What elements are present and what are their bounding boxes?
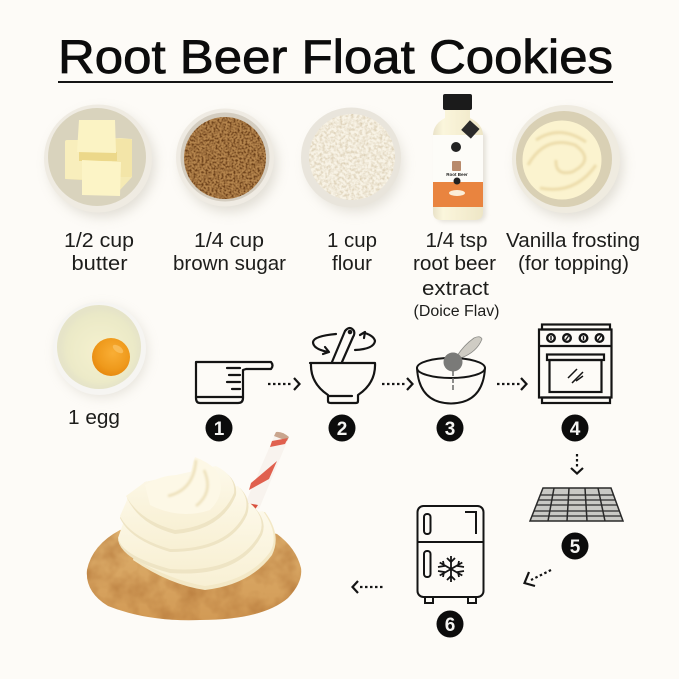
step 2: mixing bowl with spoon icon [310, 328, 375, 403]
arrow 6 to cookie [352, 581, 383, 593]
bottle label details: Root Beer [446, 172, 468, 177]
ingredient: butter [44, 104, 155, 217]
ingredient labels: butter [72, 253, 128, 275]
ingredient: root beer extract bottle [433, 94, 486, 222]
title: Root Beer Float Cookies [58, 31, 613, 84]
step number badges: 4 [570, 419, 581, 440]
step 1: measuring cup icon [196, 362, 272, 403]
tier 3 [120, 488, 248, 552]
cookie base [87, 515, 301, 620]
arrow 5 to 6 [524, 570, 551, 586]
snowflake [438, 556, 464, 582]
ingredient labels: (Doice Flav) [414, 303, 500, 320]
step 6: fridge icon [418, 506, 484, 603]
step number badges: 3 [445, 419, 455, 440]
arrow 3 to 4 [497, 378, 526, 390]
frosting swirl [118, 457, 276, 590]
tier 2 [118, 505, 264, 574]
ingredient labels: extract [422, 278, 489, 300]
ingredient labels: 1 egg [68, 407, 120, 429]
ingredient: flour [301, 108, 403, 212]
ingredient labels: 1 cup [327, 230, 377, 252]
ingredient labels: 1/2 cup [64, 230, 134, 252]
ingredient labels: flour [332, 253, 372, 275]
arrow 2 to 3 [382, 378, 412, 390]
arrow 1 to 2 [268, 378, 300, 390]
tip [145, 457, 221, 514]
finished cookie with frosting and straw [87, 432, 301, 620]
step number badges: 6 [445, 615, 455, 636]
tier 1 [133, 512, 276, 590]
ingredient labels [64, 230, 640, 429]
arrow 4 to 5 [571, 454, 583, 474]
step number badges: 2 [337, 419, 347, 440]
step 3: bowl with pouring spoon icon [417, 337, 485, 404]
step number badges: 1 [214, 419, 225, 440]
tier 4 [127, 468, 236, 534]
step number badges [206, 414, 588, 638]
straw [245, 432, 289, 511]
ingredient labels: 1/4 cup [194, 230, 264, 252]
ingredient: egg [53, 302, 147, 397]
ingredient: brown sugar [176, 108, 277, 212]
ingredient labels: Vanilla frosting [506, 230, 640, 252]
ingredient: vanilla frosting [512, 105, 623, 218]
ingredient labels: root beer [413, 253, 496, 275]
step 5: cooling rack icon [530, 488, 623, 521]
ingredient labels: 1/4 tsp [426, 230, 488, 252]
step 4: oven icon [539, 324, 612, 403]
ingredient labels: (for topping) [518, 253, 629, 275]
step number badges: 5 [570, 537, 581, 558]
ingredient labels: brown sugar [173, 253, 286, 275]
